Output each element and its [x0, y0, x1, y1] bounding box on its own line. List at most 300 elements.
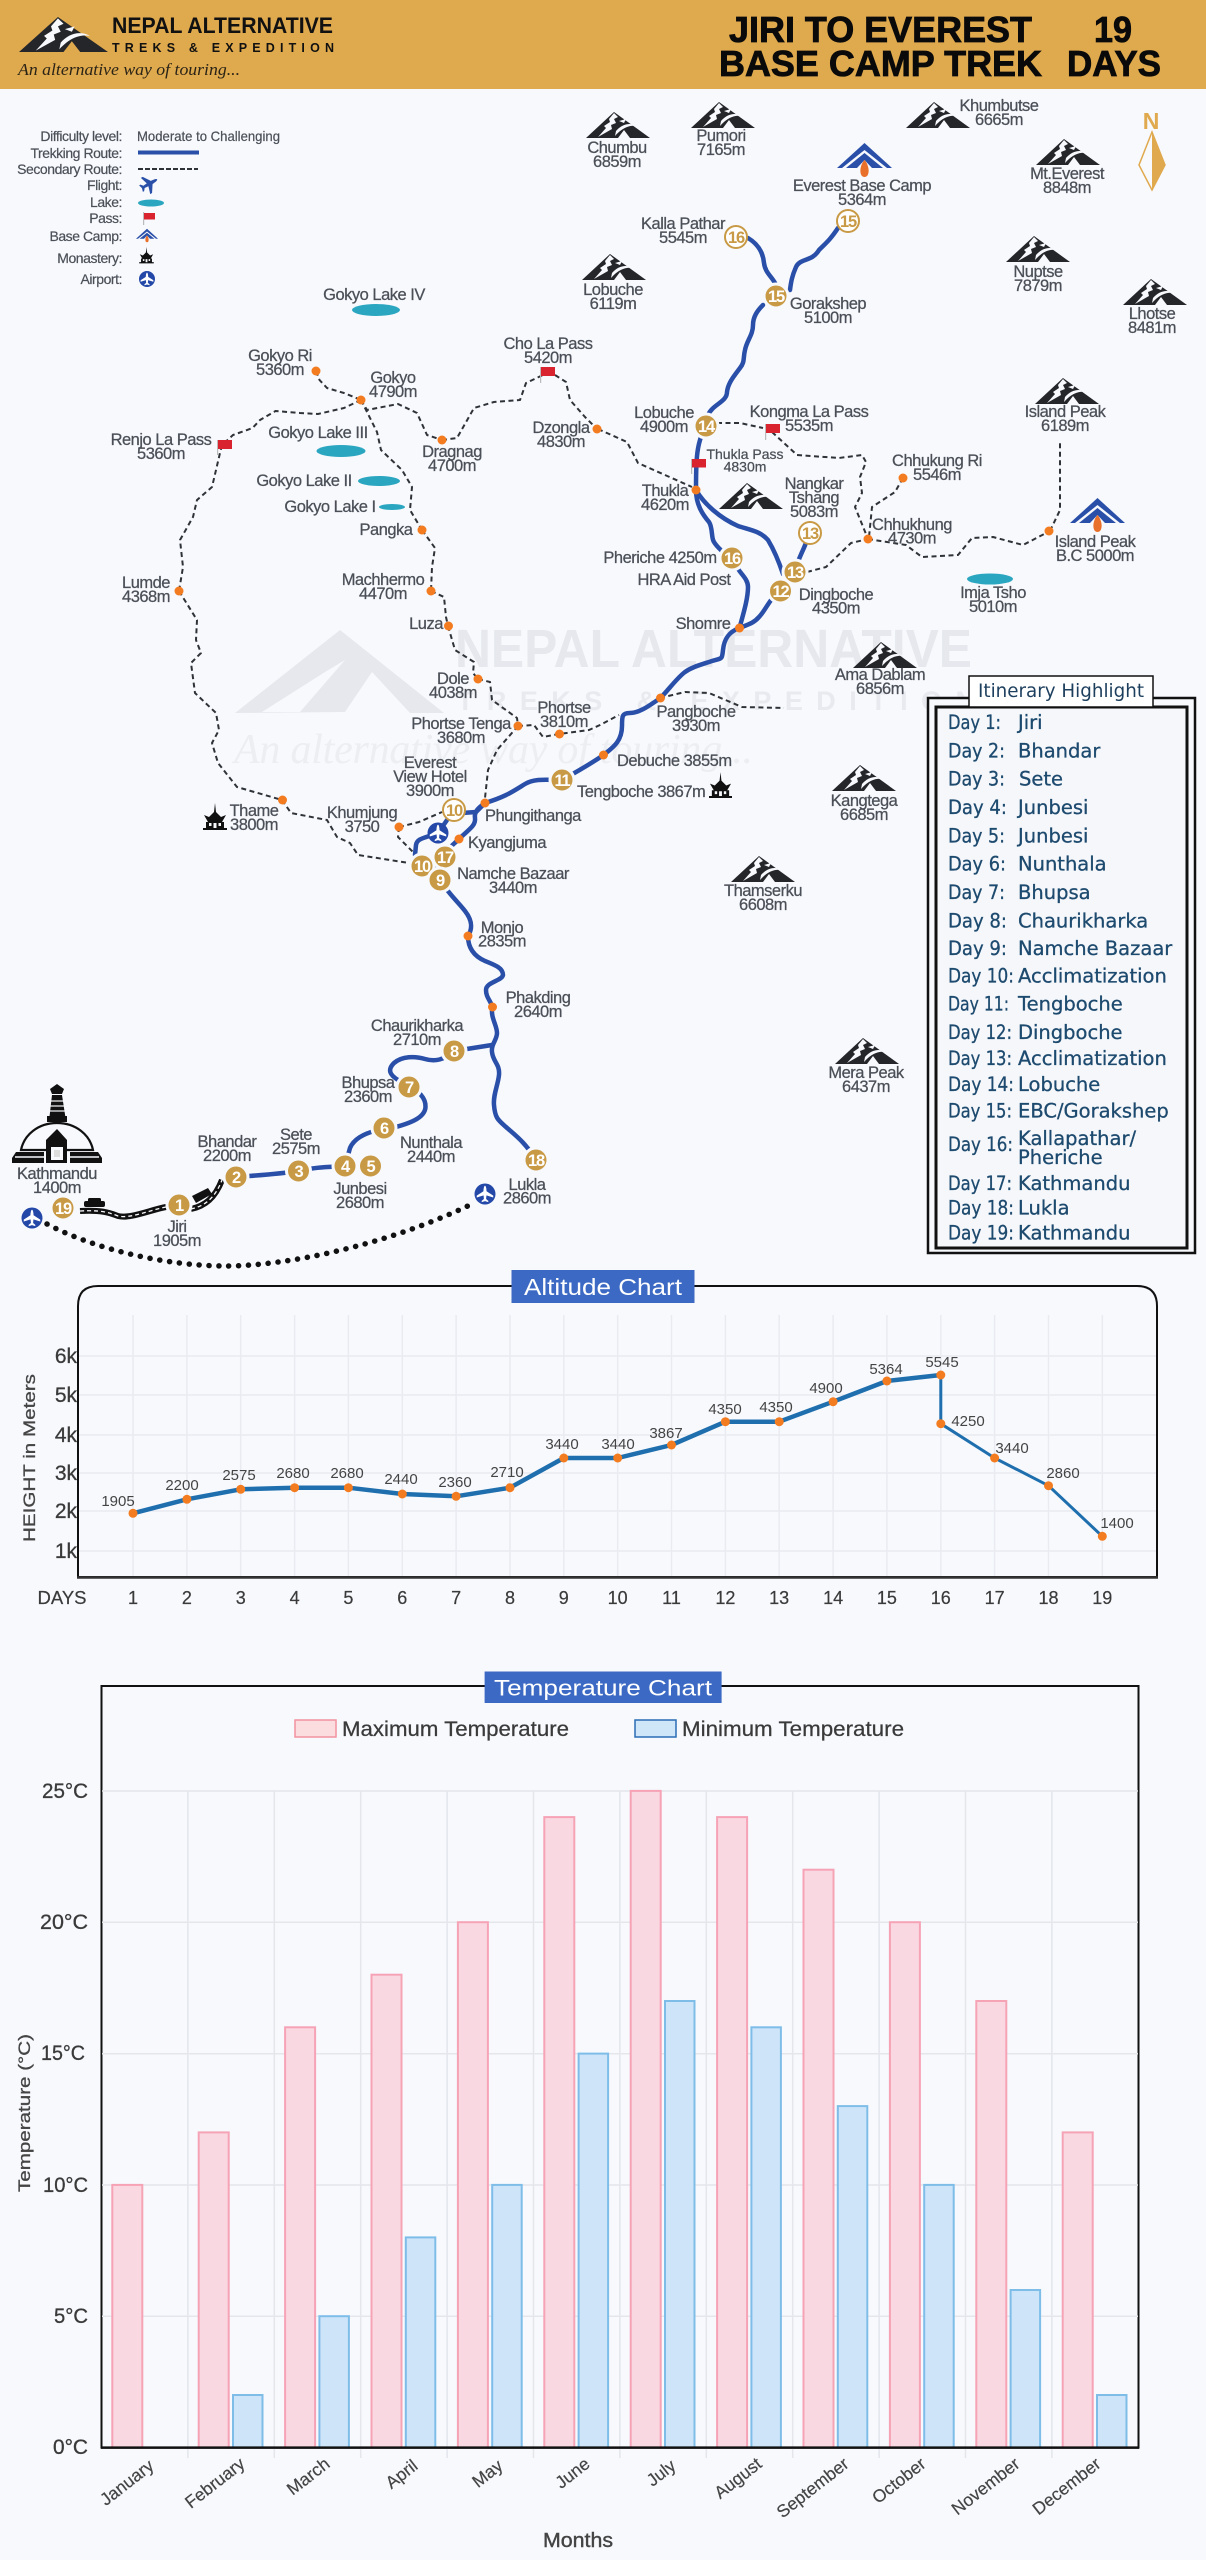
place labels: 5100m — [804, 309, 852, 327]
place labels: 3930m — [672, 717, 720, 735]
peak: Khumbutse: Khumbutse — [960, 97, 1038, 115]
peak: Chumbu: 6859m — [593, 153, 641, 171]
peak: Mera Peak: 6437m — [842, 1078, 890, 1096]
itinerary list: Junbesi — [1016, 824, 1088, 848]
place labels: Gokyo Lake II — [256, 472, 352, 490]
place labels: Gorakshep — [790, 295, 866, 313]
itinerary list: Day 8: — [948, 910, 1007, 932]
title — [719, 9, 1161, 84]
altitude points — [128, 1370, 1107, 1541]
place labels: 1400m — [33, 1179, 81, 1197]
y axis labels: 10°C — [43, 2174, 88, 2197]
day badges: 15 — [840, 213, 857, 231]
day badges: 12 — [773, 583, 789, 601]
place labels: Luza — [409, 615, 444, 633]
place labels: 2835m — [478, 932, 526, 950]
chart frame — [78, 1286, 1157, 1577]
place labels: 4700m — [428, 457, 476, 475]
place labels: Machhermo — [342, 571, 424, 589]
y axis labels: 2k — [55, 1500, 77, 1523]
legend — [17, 128, 280, 287]
x axis labels: 16 — [931, 1588, 951, 1608]
itinerary list: Day 10: — [948, 964, 1014, 987]
x axis labels: 15 — [877, 1588, 897, 1608]
legend: Pass: — [89, 210, 122, 226]
altitude value labels: 4350 — [708, 1401, 742, 1418]
itinerary list: Junbesi — [1016, 796, 1088, 819]
day badges: 17 — [437, 849, 454, 867]
month labels: January — [96, 2455, 158, 2509]
legend: minimum temperature: Minimum Temperature — [682, 1718, 904, 1741]
place labels: Kongma La Pass — [750, 403, 868, 421]
panel: temperature chart — [15, 1672, 1139, 2552]
peak: Nuptse: 7879m — [1014, 277, 1062, 295]
y axis labels: 25°C — [42, 1780, 88, 1803]
peak: Kangtega: 6685m — [840, 806, 888, 824]
place labels: 3800m — [230, 816, 278, 834]
y axis labels: 6k — [55, 1345, 77, 1368]
itinerary list: Day 11: — [948, 992, 1009, 1016]
place labels: Cho La Pass — [504, 335, 592, 353]
month labels: July — [643, 2455, 680, 2490]
place labels: Chaurikharka — [371, 1017, 463, 1035]
panel: altitude chart — [20, 1270, 1158, 1608]
place labels: 5360m — [137, 445, 185, 463]
itinerary list: Sete — [1019, 768, 1063, 791]
altitude value labels: 1905 — [101, 1493, 135, 1510]
day badges: 16 — [724, 550, 741, 568]
peak: Khumbutse — [906, 97, 1039, 129]
peak: Chumbu — [586, 112, 650, 171]
place labels: 5360m — [256, 361, 304, 379]
peak: Nangkar Tshang: Tshang — [789, 489, 839, 507]
icon: airport Syangboche — [428, 822, 448, 844]
place labels: 4470m — [359, 585, 407, 603]
itinerary list: Day 17: — [948, 1172, 1012, 1195]
day badges: 8 — [450, 1043, 459, 1061]
day badges: 15 — [768, 288, 785, 306]
place labels: Tengboche 3867m — [577, 783, 705, 801]
chart title: Altitude Chart — [524, 1274, 683, 1300]
day badges: 7 — [405, 1079, 414, 1097]
peak: Mt.Everest — [1030, 139, 1105, 197]
month labels — [96, 2453, 1105, 2522]
peak: Chumbu: Chumbu — [587, 139, 647, 157]
itinerary list: EBC/Gorakshep — [1018, 1100, 1169, 1123]
peak: Ama Dablam: Ama Dablam — [835, 666, 925, 684]
peak: Pumori — [691, 102, 755, 159]
itinerary list: Day 6: — [948, 852, 1006, 876]
base camp: Everest Base Camp: Everest Base Camp — [793, 177, 931, 195]
place labels: 4730m — [888, 530, 936, 548]
place labels: 2680m — [336, 1194, 384, 1212]
y axis labels: 5k — [55, 1384, 77, 1407]
day badges: 13 — [787, 564, 804, 582]
place labels: Gokyo Lake I — [284, 498, 376, 516]
legend: Lake: — [90, 194, 122, 210]
y axis labels: 0°C — [53, 2436, 88, 2459]
itinerary list: Day 19: — [948, 1221, 1014, 1244]
day badges: 18 — [528, 1152, 545, 1170]
place labels: 4350m — [812, 600, 860, 618]
place labels: 3680m — [437, 729, 485, 747]
altitude value labels: 3440 — [995, 1440, 1029, 1457]
legend: Airport: — [80, 271, 122, 287]
altitude value labels: 5545 — [925, 1354, 959, 1371]
peak: Thamserku: 6608m — [739, 896, 787, 914]
peak: Lhotse: 8481m — [1128, 319, 1176, 337]
itinerary list: Lukla — [1018, 1196, 1070, 1219]
icon: monastery Tengboche — [709, 772, 732, 798]
chart frame and grid — [102, 1686, 1138, 2458]
place labels: 4830m — [724, 458, 766, 474]
day badges: 10 — [446, 802, 463, 820]
peak: Ama Dablam: 6856m — [856, 680, 904, 698]
altitude value labels: 4250 — [951, 1413, 985, 1430]
altitude value labels: 2575 — [222, 1467, 256, 1484]
day badges: 1 — [175, 1197, 184, 1215]
icon: airport Kathmandu — [22, 1208, 42, 1228]
peak: Mt.Everest: Mt.Everest — [1030, 165, 1104, 183]
legend: Flight: — [87, 177, 122, 193]
itinerary list: Bhandar — [1018, 740, 1101, 762]
itinerary list: Day 14: — [948, 1073, 1014, 1096]
place labels: Namche Bazaar — [457, 865, 569, 883]
x axis labels: DAYS — [38, 1588, 86, 1608]
y axis labels: 4k — [55, 1424, 77, 1447]
place labels: Jiri — [167, 1218, 187, 1236]
place labels: Lukla — [509, 1176, 545, 1194]
month labels: June — [551, 2453, 593, 2493]
itinerary list: Kallapathar/ — [1018, 1127, 1136, 1150]
place labels: Dingboche — [799, 586, 873, 604]
itinerary list: Jiri — [1016, 711, 1043, 734]
x axis labels: 9 — [559, 1588, 569, 1608]
altitude value labels — [101, 1354, 1134, 1532]
place labels: Chhukhung — [872, 516, 952, 534]
itinerary list: Kathmandu — [1018, 1221, 1130, 1244]
itinerary list: Day 9: — [948, 937, 1007, 960]
x axis labels: 2 — [182, 1588, 192, 1608]
chart title — [512, 1270, 694, 1303]
place labels: Gokyo Ri — [248, 347, 312, 365]
peak: Thamserku: Thamserku — [724, 882, 802, 900]
logo — [17, 13, 334, 79]
altitude value labels: 1400 — [1100, 1515, 1134, 1532]
y axis labels: 15°C — [41, 2042, 85, 2065]
title: DAYS — [1067, 43, 1161, 84]
north arrow — [1139, 108, 1165, 190]
peak: Lhotse: Lhotse — [1129, 305, 1175, 323]
day badges: 2 — [232, 1169, 241, 1187]
place labels: 2440m — [407, 1148, 455, 1166]
altitude value labels: 2860 — [1046, 1465, 1080, 1482]
day badges: 11 — [554, 772, 571, 790]
place labels: 4038m — [429, 684, 477, 702]
place labels: Gokyo Lake IV — [323, 286, 425, 304]
altitude value labels: 4350 — [759, 1399, 793, 1416]
logo: An alternative way of touring... — [17, 60, 240, 79]
itinerary list: Day 3: — [948, 768, 1005, 791]
month labels: August — [710, 2453, 766, 2503]
altitude value labels: 3440 — [545, 1436, 579, 1453]
place labels: Phortse Tenga — [411, 715, 511, 733]
x axis labels: 1 — [128, 1588, 138, 1608]
y axis title: HEIGHT in Meters — [20, 1374, 39, 1542]
month labels: February — [181, 2453, 249, 2512]
altitude value labels: 2440 — [384, 1471, 418, 1488]
place labels: 2200m — [203, 1147, 251, 1165]
place labels: Everest — [404, 754, 456, 772]
north arrow: N — [1143, 108, 1159, 134]
place labels: 2710m — [393, 1031, 441, 1049]
place labels: 2640m — [514, 1003, 562, 1021]
x axis labels — [38, 1588, 1112, 1608]
itinerary list: Day 1: — [948, 711, 1001, 734]
place labels: Sete — [280, 1126, 312, 1144]
month labels: March — [283, 2453, 333, 2499]
icon: Kathmandu stupa — [12, 1084, 102, 1163]
place labels: Thukla Pass — [706, 446, 784, 462]
day badges: 16 — [728, 229, 745, 247]
day badges: 9 — [436, 872, 445, 890]
legend: Base Camp: — [49, 228, 122, 244]
peak: Nangkar Tshang — [719, 475, 844, 521]
place labels: Gokyo Lake III — [268, 424, 368, 442]
peak: Lobuche: Lobuche — [583, 281, 643, 299]
x axis labels: 14 — [823, 1588, 843, 1608]
chart title — [485, 1672, 722, 1703]
itinerary list: Acclimatization — [1018, 964, 1167, 987]
watermark: An alternative way of touring... — [231, 727, 753, 773]
minimum temperature bars — [233, 2001, 1126, 2448]
x axis labels: 5 — [343, 1588, 353, 1608]
day badges: 13 — [802, 525, 819, 543]
place labels: Phakding — [506, 989, 570, 1007]
pass flags — [217, 367, 780, 474]
title: 19 — [1094, 9, 1132, 50]
x axis title: Months — [543, 2530, 613, 2552]
altitude value labels: 2680 — [330, 1465, 364, 1482]
road Kathmandu to Jiri — [80, 1180, 222, 1217]
x axis labels: 12 — [715, 1588, 735, 1608]
peak: Pumori: Pumori — [696, 127, 746, 145]
day badges — [51, 210, 859, 1220]
place labels: Shomre — [676, 615, 731, 633]
itinerary list: Lobuche — [1018, 1073, 1100, 1096]
peak: Mera Peak: Mera Peak — [828, 1064, 904, 1082]
month labels: September — [773, 2453, 853, 2522]
place labels: Pangka — [360, 521, 414, 539]
day badges: 14 — [698, 418, 716, 436]
place labels: Khumjung — [327, 804, 397, 822]
place labels: Dzongla — [532, 419, 590, 437]
place labels: Pangboche — [656, 703, 736, 721]
place labels: Kalla Pathar — [641, 215, 725, 233]
peak: Kangtega: Kangtega — [831, 792, 897, 810]
watermark: TREKS & EXPEDITION — [457, 686, 975, 716]
peak: Khumbutse: 6665m — [975, 111, 1023, 129]
day badges: 6 — [380, 1120, 389, 1138]
place labels: 3810m — [540, 713, 588, 731]
x axis labels: 19 — [1092, 1588, 1112, 1608]
legend: maximum temperature: Maximum Temperature — [342, 1718, 569, 1741]
itinerary list: Day 12: — [948, 1021, 1012, 1044]
itinerary list: Day 4: — [948, 796, 1007, 819]
place labels: 4620m — [641, 496, 689, 514]
place labels: Gokyo — [370, 369, 416, 387]
place labels: Lobuche — [634, 404, 694, 422]
itinerary list: Day 7: — [948, 881, 1005, 904]
x axis labels: 17 — [985, 1588, 1005, 1608]
place labels: 2575m — [272, 1140, 320, 1158]
place labels: Lumde — [122, 574, 170, 592]
place labels — [17, 215, 1026, 1250]
x axis labels: 8 — [505, 1588, 515, 1608]
peak: Ama Dablam — [835, 642, 925, 698]
peak: Island Peak: 6189m — [1041, 417, 1089, 435]
place labels: Renjo La Pass — [111, 431, 211, 449]
lakes — [316, 304, 1013, 584]
base camp: Everest Base Camp — [793, 143, 931, 209]
place labels: 4368m — [122, 588, 170, 606]
base camp: Island Peak B.C: Island Peak — [1055, 533, 1135, 551]
flight path — [47, 1202, 476, 1266]
place labels: Bhandar — [198, 1133, 256, 1151]
itinerary list: Day 18: — [948, 1196, 1014, 1219]
watermark — [231, 619, 975, 773]
legend: Difficulty level: — [40, 128, 122, 144]
altitude value labels: 2710 — [490, 1464, 524, 1481]
icon: airport Lukla — [474, 1184, 496, 1204]
day badges: 19 — [55, 1200, 72, 1218]
place labels: 5546m — [913, 466, 961, 484]
month labels: November — [948, 2453, 1024, 2519]
altitude value labels: 2360 — [438, 1474, 472, 1491]
itinerary list: Tengboche — [1017, 992, 1123, 1016]
y axis labels: 1k — [55, 1540, 77, 1563]
place labels: 1905m — [153, 1232, 201, 1250]
base camp: Island Peak B.C: B.C 5000m — [1056, 547, 1134, 565]
peak: Thamserku — [724, 856, 802, 914]
day badges: 10 — [414, 858, 431, 876]
x axis labels: 4 — [290, 1588, 300, 1608]
itinerary list: Day 15: — [948, 1100, 1012, 1123]
peak: Nangkar Tshang: 5083m — [790, 503, 838, 521]
itinerary list: Nunthala — [1018, 852, 1107, 876]
itinerary list: Day 13: — [948, 1047, 1012, 1070]
title: BASE CAMP TREK — [719, 43, 1042, 84]
altitude value labels: 3440 — [601, 1436, 635, 1453]
y axis labels: 5°C — [54, 2305, 88, 2328]
day badges: 4 — [341, 1158, 351, 1176]
chart title: Temperature Chart — [494, 1676, 712, 1700]
logo: NEPAL ALTERNATIVE — [112, 13, 333, 38]
itinerary list: Pheriche — [1018, 1146, 1103, 1169]
itinerary heading — [969, 676, 1153, 707]
peak: Nuptse: Nuptse — [1013, 263, 1063, 281]
itinerary list: Day 16: — [948, 1133, 1013, 1156]
place labels: 3750 — [345, 818, 380, 836]
place labels: Bhupsa — [342, 1074, 394, 1092]
place labels: Dragnag — [422, 443, 482, 461]
legend: Moderate to Challenging — [137, 128, 280, 144]
month labels: April — [382, 2455, 421, 2493]
maximum temperature bars — [112, 1791, 1093, 2448]
place labels: Nunthala — [400, 1134, 462, 1152]
place labels: 3440m — [489, 879, 537, 897]
itinerary list: Chaurikharka — [1018, 910, 1148, 932]
place labels: View Hotel — [393, 768, 467, 786]
legend: Secondary Route: — [17, 161, 122, 177]
place labels: Phungithanga — [485, 807, 582, 825]
secondary routes — [179, 371, 1060, 863]
y axis labels: 3k — [55, 1462, 77, 1485]
peak: Nangkar Tshang: Nangkar — [785, 475, 843, 493]
x axis labels: 18 — [1038, 1588, 1059, 1608]
x axis labels: 10 — [608, 1588, 628, 1608]
month labels: December — [1029, 2453, 1105, 2519]
altitude value labels: 4900 — [809, 1380, 843, 1397]
place labels: Phortse — [537, 699, 591, 717]
place labels: Junbesi — [333, 1180, 387, 1198]
header band — [0, 0, 1206, 89]
place labels: Imja Tsho — [960, 584, 1026, 602]
place labels: 4830m — [537, 433, 585, 451]
place labels: 4790m — [369, 383, 417, 401]
descent line — [941, 1375, 1102, 1536]
watermark: NEPAL ALTERNATIVE — [455, 619, 972, 679]
place labels: 5010m — [969, 598, 1017, 616]
place labels: Dole — [437, 670, 469, 688]
day badges: 3 — [295, 1163, 304, 1181]
y axis title: Temperature (°C) — [15, 2034, 34, 2192]
place labels: Pheriche 4250m — [603, 549, 717, 567]
altitude value labels: 3867 — [649, 1425, 683, 1442]
legend: Trekking Route: — [30, 145, 122, 161]
place labels: HRA Aid Post — [637, 571, 731, 589]
itinerary list: Dingboche — [1018, 1021, 1123, 1044]
itinerary list: Namche Bazaar — [1018, 937, 1173, 960]
place labels: Kathmandu — [17, 1165, 97, 1183]
icon: vehicle — [84, 1198, 105, 1207]
x axis labels: 11 — [662, 1588, 681, 1608]
place labels: Monjo — [481, 919, 523, 937]
y axis labels: 20°C — [40, 1911, 88, 1934]
place labels: Thame — [230, 802, 278, 820]
altitude value labels: 2200 — [165, 1477, 199, 1494]
waypoint dots — [174, 366, 1054, 1012]
itinerary list — [948, 711, 1173, 1244]
place labels: 5420m — [524, 349, 572, 367]
itinerary list: Bhupsa — [1018, 881, 1091, 904]
peak: Island Peak — [1025, 378, 1107, 435]
icon: monastery Thame — [203, 803, 227, 830]
peak: Mera Peak — [828, 1038, 905, 1096]
month labels: October — [868, 2453, 930, 2507]
place labels: Chhukung Ri — [892, 452, 982, 470]
peak: Lobuche: 6119m — [590, 295, 636, 313]
altitude line — [133, 1375, 941, 1513]
place labels: 4900m — [640, 418, 688, 436]
x axis labels: 6 — [397, 1588, 407, 1608]
itinerary list: Day 2: — [948, 740, 1005, 762]
peak: Kangtega — [831, 765, 899, 824]
altitude value labels: 5364 — [869, 1361, 903, 1378]
peak: Lhotse — [1123, 279, 1187, 337]
day badges: 5 — [367, 1158, 376, 1176]
x axis labels: 13 — [769, 1588, 789, 1608]
